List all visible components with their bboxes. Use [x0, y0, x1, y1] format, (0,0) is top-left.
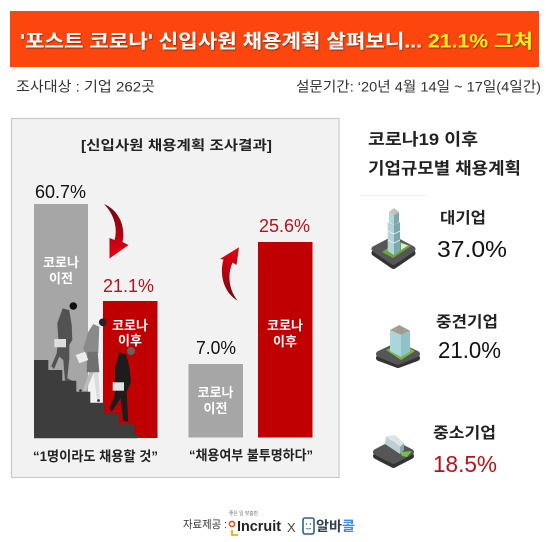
- bar: after corona 21.1%: 코로나: [112, 318, 148, 333]
- logo: Albacall: [303, 518, 355, 534]
- bar: before corona 7.0%: 코로나: [198, 385, 233, 400]
- logo: Incruit: 좋은 일 맞춤판: [229, 510, 258, 517]
- bar: after corona 21.1%: [103, 276, 158, 438]
- value: 21.0%: [438, 337, 501, 363]
- mid-size company: [379, 313, 501, 365]
- footer: sources: X: [287, 520, 296, 535]
- bar: after corona 21.1%: 21.1%: [103, 276, 154, 296]
- bar: before corona 7.0%: 이전: [204, 401, 227, 416]
- logo: Albacall: 콜: [342, 519, 355, 534]
- logo: Incruit: [229, 510, 281, 535]
- title text: 21.1% 그쳐: [428, 30, 533, 52]
- arrow: decrease: [104, 204, 128, 258]
- title text: '포스트 코로나' 신입사원 채용계획 살펴보니...: [20, 30, 422, 52]
- logo: Incruit: Incruit: [237, 519, 281, 535]
- value: 18.5%: [433, 451, 497, 477]
- heading: plans by company size: [368, 130, 521, 178]
- bar: before corona 60.7%: 60.7%: [35, 182, 86, 202]
- panel heading: [신입사원 채용계획 조사결과]: [81, 138, 272, 153]
- bar: after corona 25.6%: 25.6%: [259, 216, 310, 236]
- chart: uncertain: [188, 216, 313, 463]
- worker 1: [51, 302, 77, 381]
- bar: before corona 7.0%: [188, 338, 243, 438]
- label: 중견기업: [436, 313, 498, 331]
- icon: low building: [376, 435, 412, 465]
- bar: before corona 60.7%: 이전: [49, 271, 73, 286]
- survey period: 설문기간: ‘20년 4월 14일 ~ 17일(4일간): [296, 78, 541, 94]
- label: 대기업: [440, 209, 486, 227]
- caption: “채용여부 불투명하다”: [189, 448, 313, 463]
- logo: Albacall: 알바: [316, 519, 343, 534]
- bar: after corona 25.6%: 이후: [273, 334, 297, 349]
- heading: plans by company size: 기업규모별 채용계획: [368, 159, 521, 178]
- bar: after corona 25.6%: [258, 216, 312, 438]
- bar: before corona 60.7%: [34, 182, 88, 438]
- arrow: increase: [220, 247, 239, 301]
- large company: [374, 208, 507, 266]
- title text: [20, 30, 533, 52]
- survey target: 조사대상 : 기업 262곳: [16, 78, 155, 94]
- value: 37.0%: [437, 236, 507, 262]
- label: 중소기업: [433, 424, 496, 442]
- worker 2: [76, 318, 106, 402]
- illustration: stairs and walking workers: [34, 302, 138, 438]
- icon: skyscraper: [374, 208, 412, 266]
- footer: sources: 자료제공 :: [183, 518, 227, 531]
- footer: sources: [183, 510, 355, 535]
- stairs: [34, 360, 138, 438]
- caption: “1명이라도 채용할 것”: [33, 449, 158, 464]
- worker 3: [109, 347, 135, 422]
- bar: after corona 25.6%: 코로나: [267, 318, 303, 333]
- bar: after corona 21.1%: 이후: [118, 333, 142, 348]
- bar: before corona 7.0%: 7.0%: [196, 338, 236, 358]
- panel: survey results: [12, 118, 339, 478]
- icon: office building: [379, 325, 417, 365]
- chart: hire at least one: [33, 182, 158, 464]
- title banner: [10, 11, 539, 67]
- bar: before corona 60.7%: 코로나: [43, 255, 79, 270]
- small company: [376, 424, 497, 477]
- heading: plans by company size: 코로나19 이후: [368, 130, 478, 149]
